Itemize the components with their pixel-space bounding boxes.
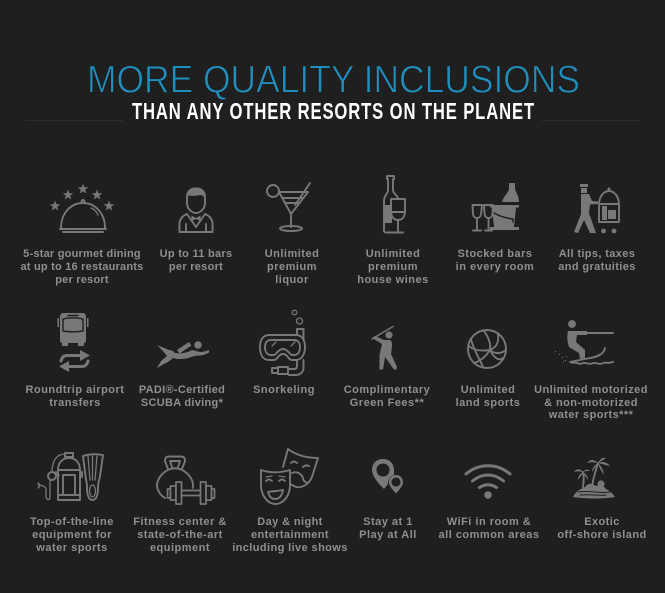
label: Unlimited <box>265 248 319 260</box>
item: tips <box>558 184 636 273</box>
label: PADI®-Certified <box>139 384 225 396</box>
item: entertainment <box>232 449 348 554</box>
item: house wines <box>357 176 429 286</box>
label: Unlimited <box>366 248 420 260</box>
icon: theatre masks <box>261 449 318 504</box>
label: premium <box>368 261 418 273</box>
label: Snorkeling <box>253 384 315 396</box>
label: at up to 16 restaurants <box>20 261 144 273</box>
icon: champagne bucket and glasses <box>472 183 519 230</box>
label: Fitness center & <box>133 516 227 528</box>
icon: bellhop with cart <box>574 184 619 233</box>
label: per resort <box>55 274 109 286</box>
icon: palm tree island <box>573 458 615 498</box>
label: WiFi in room & <box>447 516 531 528</box>
item: island <box>557 458 647 541</box>
item: bars <box>160 188 232 273</box>
label: Stay at 1 <box>363 516 413 528</box>
icon: volleyball <box>468 330 506 368</box>
label: Unlimited <box>461 384 515 396</box>
label: Green Fees** <box>350 397 424 409</box>
label: Exotic <box>584 516 620 528</box>
label: premium <box>267 261 317 273</box>
icon: martini glass <box>267 183 310 231</box>
label: Roundtrip airport <box>26 384 124 396</box>
label: Complimentary <box>344 384 431 396</box>
label: including live shows <box>232 542 348 554</box>
icon: kettlebell and dumbbell <box>157 456 214 504</box>
label: & non-motorized <box>544 397 638 409</box>
icon: map pins <box>372 459 403 494</box>
item: fitness <box>133 456 227 554</box>
label: all common areas <box>439 529 539 541</box>
label: house wines <box>357 274 429 286</box>
label: and gratuities <box>558 261 636 273</box>
label: water sports <box>35 542 108 554</box>
item: gourmet dining <box>20 184 144 286</box>
item: water sports equipment <box>30 453 114 554</box>
label: Day & night <box>257 516 323 528</box>
item: land sports <box>456 330 520 409</box>
label: Play at All <box>359 529 417 541</box>
item: green fees <box>344 326 431 409</box>
label: Unlimited motorized <box>534 384 648 396</box>
icon: scuba diver <box>157 341 209 368</box>
item: stocked bars <box>456 183 534 273</box>
icon: waiter <box>180 188 212 232</box>
label: transfers <box>49 397 101 409</box>
label: liquor <box>275 274 309 286</box>
label: SCUBA diving* <box>141 397 224 409</box>
icon: bus with arrows <box>58 313 90 372</box>
label: Up to 11 bars <box>160 248 232 260</box>
item: stay at 1 <box>359 459 417 541</box>
label: per resort <box>169 261 223 273</box>
label: Top-of-the-line <box>30 516 114 528</box>
label: All tips, taxes <box>559 248 635 260</box>
item: water sports <box>534 320 648 421</box>
label: state-of-the-art <box>137 529 223 541</box>
icon: water skier <box>555 320 613 364</box>
icon: scuba tank and fin <box>38 453 103 500</box>
label: water sports*** <box>548 409 634 421</box>
item: wifi <box>439 466 539 541</box>
icon: wine bottle and glass <box>384 176 405 232</box>
label: in every room <box>456 261 534 273</box>
item: scuba diving <box>139 341 225 409</box>
icon: golfer <box>372 326 397 370</box>
item: liquor <box>265 183 319 286</box>
icon: snorkel and mask <box>260 310 305 375</box>
label: off-shore island <box>557 529 647 541</box>
label: equipment <box>150 542 210 554</box>
item: snorkeling <box>253 310 315 396</box>
icon: cloche with stars <box>50 184 114 232</box>
label: 5-star gourmet dining <box>23 248 141 260</box>
title: MORE QUALITY INCLUSIONS <box>87 58 580 102</box>
label: land sports <box>456 397 520 409</box>
label: Stocked bars <box>457 248 533 260</box>
icon: wifi <box>466 466 510 499</box>
item: airport transfers <box>26 313 124 409</box>
label: entertainment <box>251 529 329 541</box>
label: equipment for <box>32 529 112 541</box>
